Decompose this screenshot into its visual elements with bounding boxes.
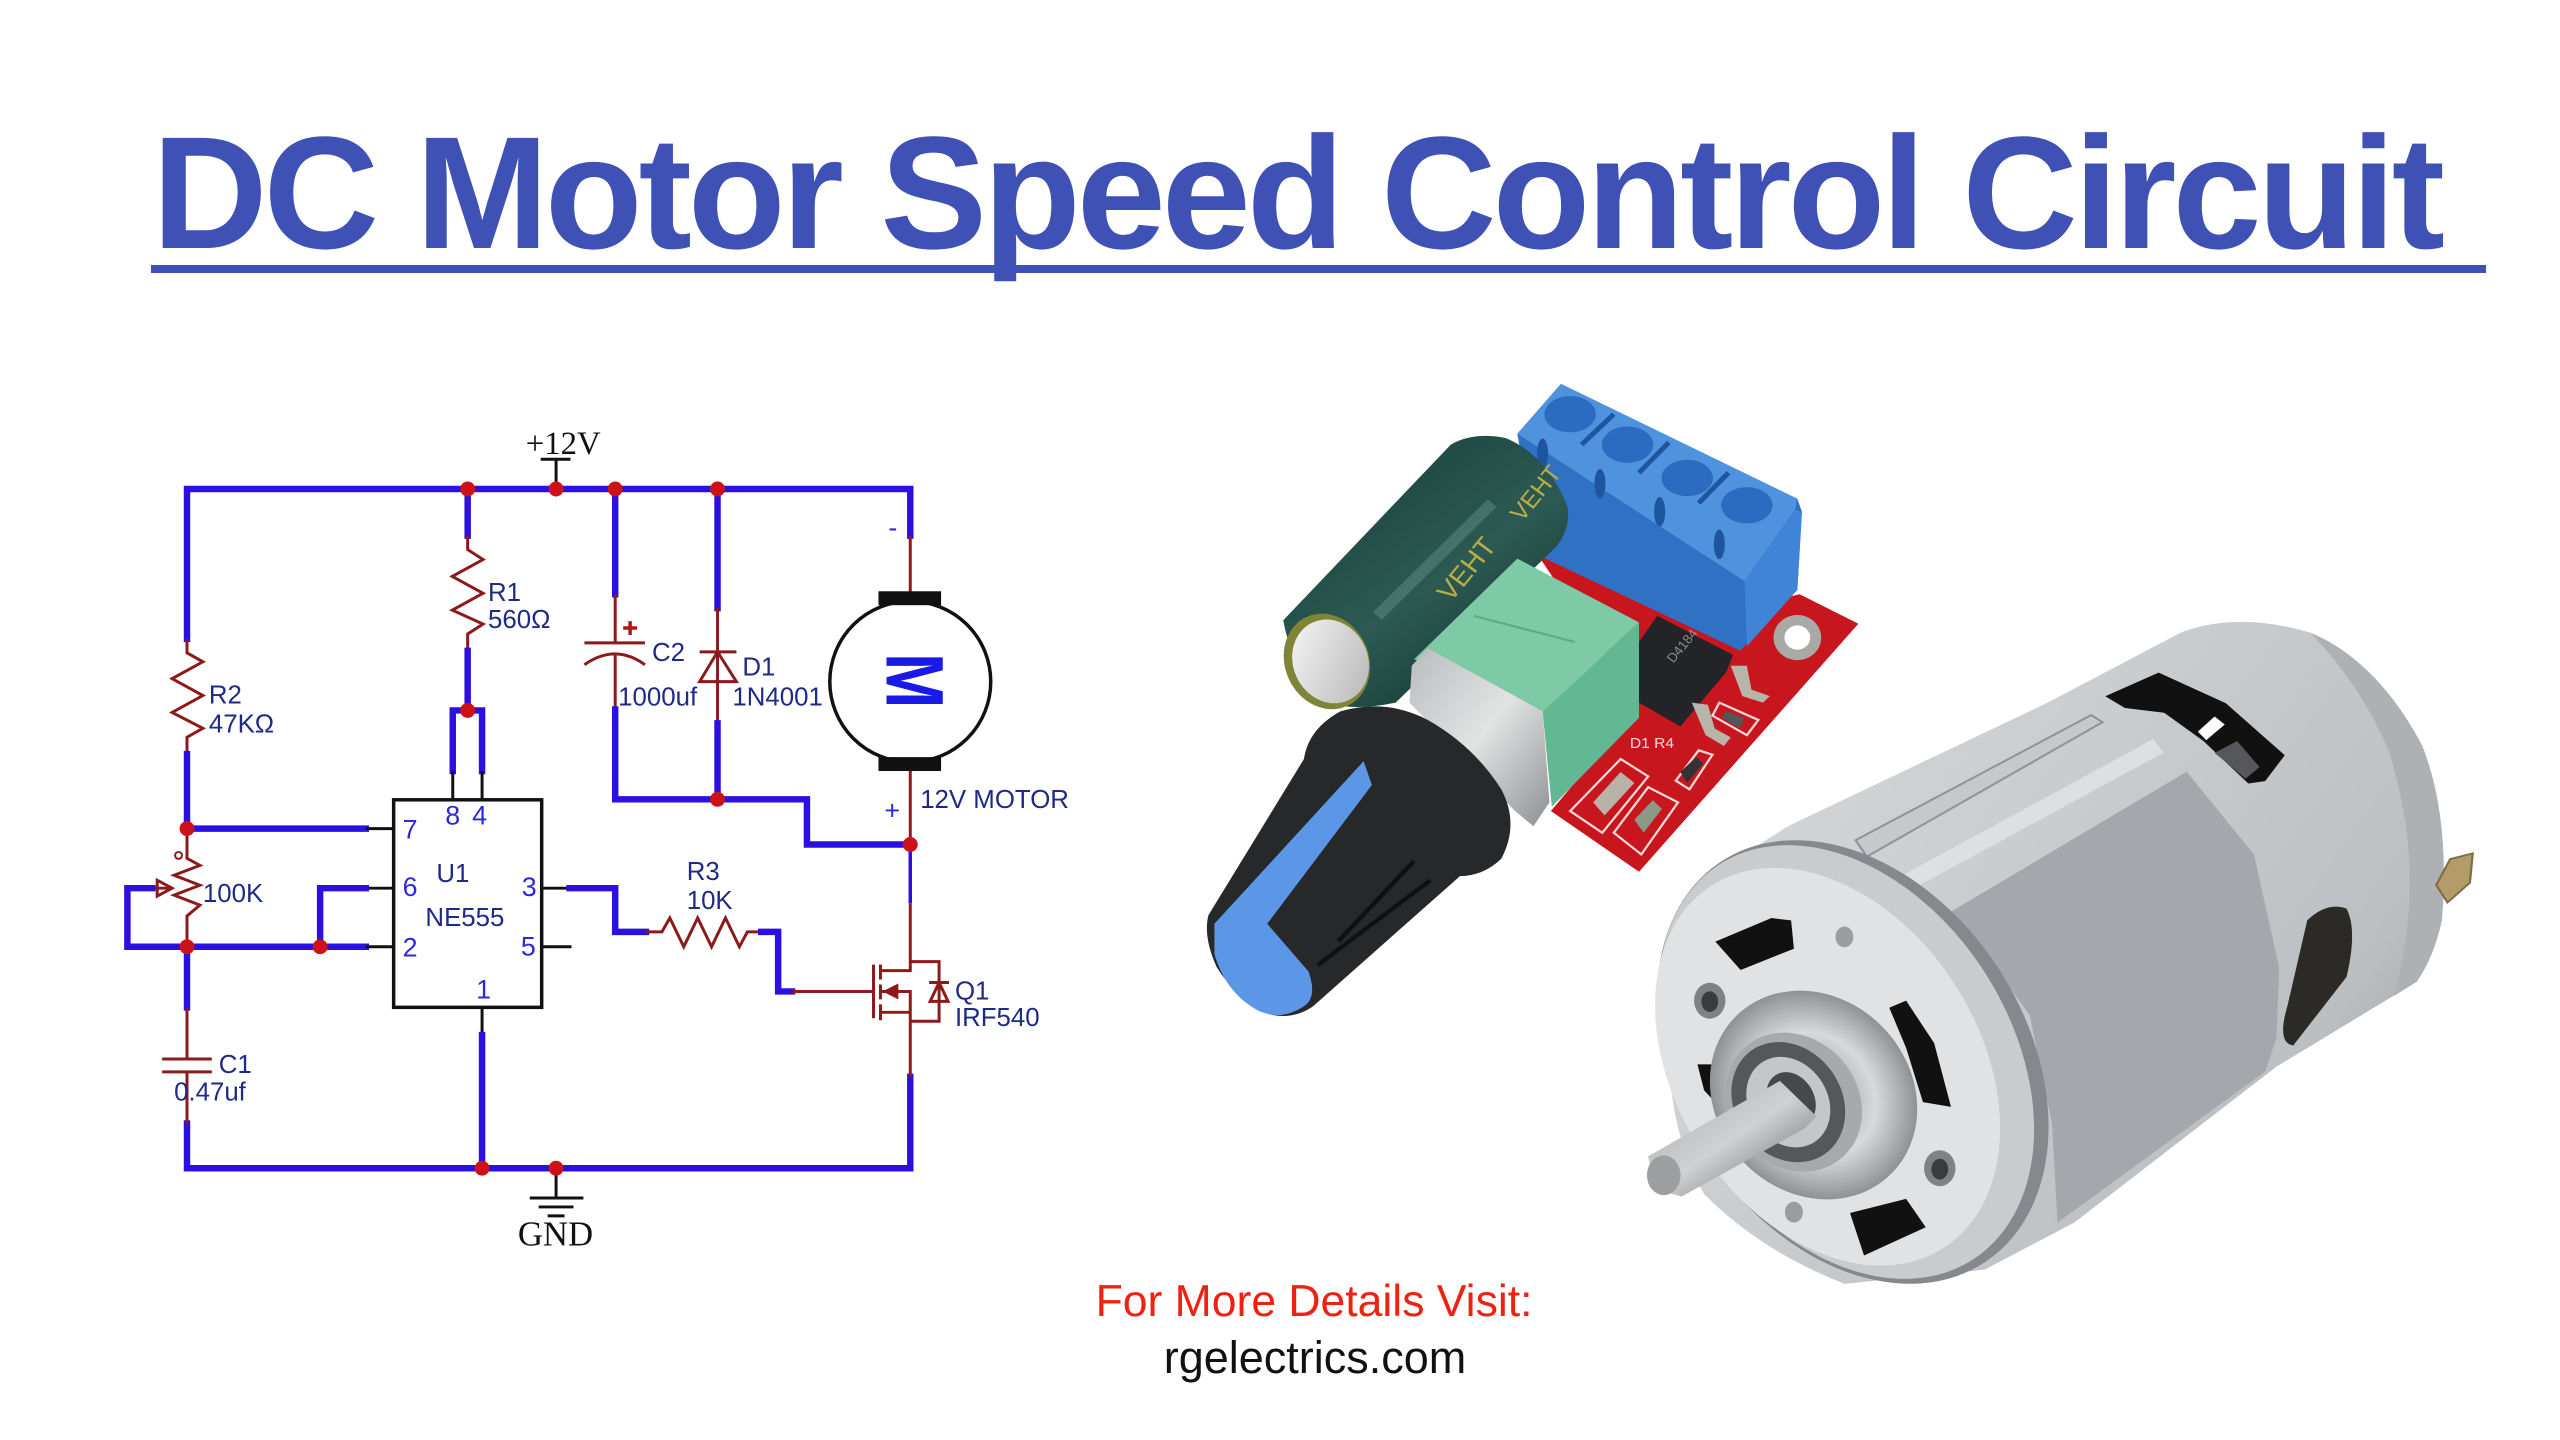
resistor R1 bbox=[452, 489, 550, 710]
resistor R3 bbox=[569, 858, 792, 991]
MOSFET Q1: Q1 bbox=[955, 977, 989, 1005]
motor side window bbox=[2283, 907, 2352, 1045]
IC U1 NE555: 3 bbox=[522, 872, 537, 902]
motor terminal tab bbox=[2436, 853, 2473, 902]
diode D1 bbox=[700, 489, 823, 799]
potentiometer 100K bbox=[127, 829, 366, 947]
capacitor C2 bbox=[584, 489, 910, 844]
IC U1 NE555: 4 bbox=[472, 801, 487, 831]
motor symbol: + bbox=[884, 796, 900, 826]
ground rail and GND symbol: GND bbox=[518, 1215, 593, 1254]
MOSFET Q1 bbox=[792, 844, 1040, 1077]
IC U1 NE555: 8 bbox=[445, 801, 460, 831]
motor symbol: - bbox=[888, 513, 897, 543]
power rail and +12V symbol: +12V bbox=[526, 426, 601, 462]
IC U1 NE555: 5 bbox=[521, 932, 536, 962]
IC U1 NE555: NE555 bbox=[425, 904, 504, 932]
title: DC Motor Speed Control Circuit bbox=[152, 103, 2445, 282]
capacitor C1: C1 bbox=[219, 1051, 252, 1079]
IC U1 NE555: 1 bbox=[476, 974, 491, 1004]
metal potentiometer bracket bbox=[1410, 648, 1549, 826]
resistor R2: R2 bbox=[209, 681, 242, 709]
power rail and +12V symbol bbox=[187, 426, 910, 639]
motor front rim bbox=[1583, 791, 2122, 1333]
motor screw holes bbox=[1694, 927, 1955, 1222]
diode D1: D1 bbox=[742, 654, 775, 682]
resistor R2 bbox=[172, 639, 274, 829]
diode D1: 1N4001 bbox=[732, 683, 823, 711]
MOSFET chip bbox=[1639, 616, 1770, 746]
motor symbol: 12V MOTOR bbox=[920, 786, 1069, 814]
IC U1 NE555: 2 bbox=[403, 933, 417, 963]
resistor R1: R1 bbox=[488, 579, 521, 607]
motor label band bbox=[1944, 772, 2279, 1222]
MOSFET Q1: IRF540 bbox=[955, 1004, 1040, 1032]
motor rear shading bbox=[2310, 632, 2444, 996]
electrolytic capacitor: VEHT bbox=[1505, 461, 1568, 526]
resistor R1: 560Ω bbox=[488, 606, 550, 634]
PWM controller module photo illustration bbox=[1207, 384, 1858, 1016]
motor body highlight bbox=[1889, 746, 2159, 892]
ground rail and GND symbol bbox=[187, 1077, 910, 1254]
motor vents bbox=[1697, 918, 1951, 1256]
motor shaft bbox=[1647, 1081, 1816, 1197]
red PCB: D1 R4 bbox=[1630, 736, 1674, 752]
IC U1 NE555: 6 bbox=[403, 872, 417, 902]
capacitor C1: 0.47uf bbox=[174, 1079, 247, 1107]
IC U1 NE555: 7 bbox=[403, 815, 417, 845]
footer: website: rgelectrics.com bbox=[1164, 1332, 1466, 1383]
motor top plate bbox=[1856, 715, 2102, 857]
motor front plate bbox=[1589, 825, 2066, 1309]
resistor R3: 10K bbox=[687, 887, 733, 915]
footer: call to action: For More Details Visit: bbox=[1096, 1277, 1532, 1326]
capacitor C1 bbox=[162, 947, 252, 1124]
motor symbol bbox=[830, 513, 1069, 844]
motor symbol: M bbox=[869, 653, 960, 708]
motor boss and bearing bbox=[1679, 968, 1949, 1222]
resistor R3: R3 bbox=[687, 858, 720, 886]
capacitor C2: C2 bbox=[652, 639, 685, 667]
electrolytic capacitor bbox=[1271, 436, 1568, 720]
pin 7, 6, 2 wires bbox=[187, 829, 394, 947]
green potentiometer housing bbox=[1414, 559, 1639, 807]
resistor R2: 47KΩ bbox=[209, 710, 274, 738]
red PCB bbox=[1538, 555, 1858, 872]
potentiometer 100K: 100K bbox=[203, 880, 263, 908]
IC U1 NE555: U1 bbox=[436, 860, 469, 888]
junction dots bbox=[180, 482, 918, 1176]
knob bbox=[1207, 706, 1510, 1016]
capacitor C2: 1000uf bbox=[618, 683, 698, 711]
MOSFET chip: D4184 bbox=[1664, 626, 1701, 665]
IC U1 NE555 bbox=[394, 800, 571, 1168]
motor body bbox=[1668, 622, 2444, 1284]
electrolytic capacitor: VEHT bbox=[1431, 531, 1502, 606]
pins 8 and 4 link bbox=[453, 710, 482, 800]
blue terminal block bbox=[1517, 384, 1802, 651]
DC motor photo illustration bbox=[1583, 622, 2473, 1333]
circuit schematic bbox=[127, 426, 1069, 1254]
motor top window bbox=[2105, 673, 2285, 784]
